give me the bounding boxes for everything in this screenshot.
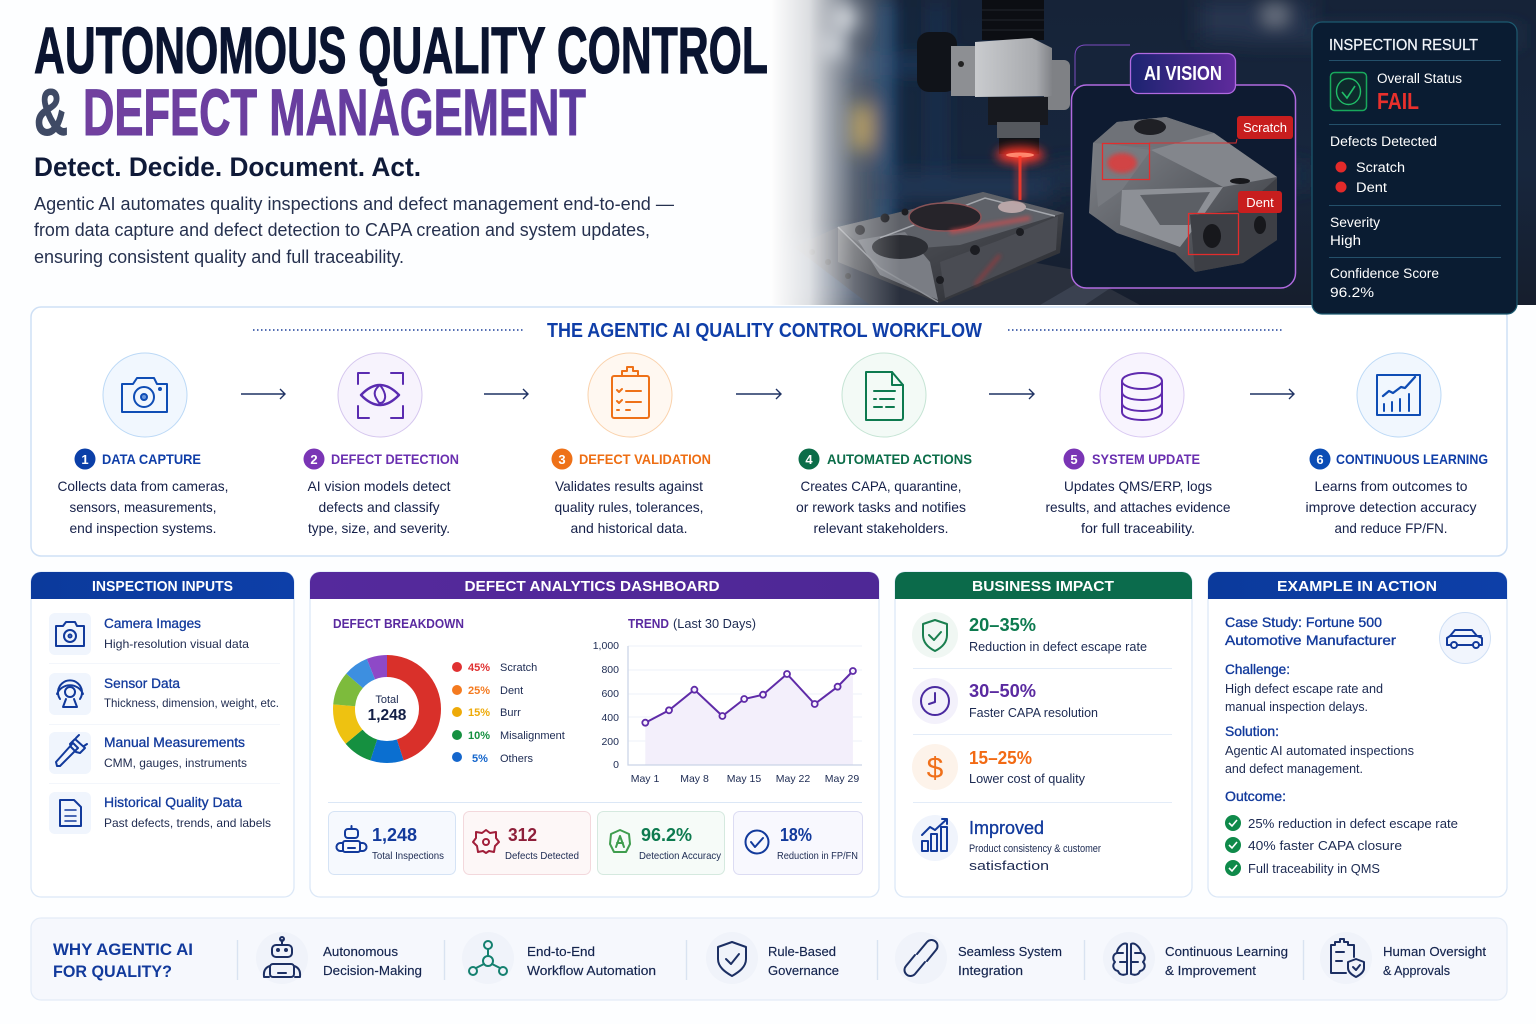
benefit: seamless system integration: Seamless System [958,944,1062,959]
input: manual measurements [49,732,247,774]
challenge: Challenge: [1225,661,1290,677]
impact: defect escape: Reduction in defect escape rate [969,640,1147,654]
AI vision panel [1072,45,1296,288]
panel: inspection result: High [1330,233,1361,248]
input: manual measurements: CMM, gauges, instruments [104,756,247,770]
panel: inspection result: FAIL [1377,88,1419,114]
step 5: system update: for full traceability. [1081,520,1195,536]
solution: and defect management. [1225,762,1363,776]
step 5: system update: 5 [1070,452,1078,467]
step 6: continuous learning: 6 [1316,452,1324,467]
line chart: trend: 600 [601,688,619,700]
impact: CAPA resolution [912,678,1098,724]
panel: why agentic AI [31,918,1507,1000]
impact: product consistency [912,815,1101,873]
icon: car [1440,612,1490,664]
step 6: continuous learning: CONTINUOUS LEARNING [1336,451,1488,467]
step 3: defect validation: and historical data. [570,520,688,536]
step 4: automated actions: relevant stakeholders. [814,520,948,536]
panel: inspection result: Scratch [1356,160,1405,175]
step 1: data capture: 1 [81,452,89,467]
input: camera images: Camera Images [104,616,201,631]
step 2: defect detection: DEFECT DETECTION [331,451,459,467]
donut chart: Total [375,694,399,706]
benefit: continuous learning [1103,932,1288,984]
line chart: trend: May 8 [680,773,709,785]
challenge [1225,661,1383,714]
KPI: detection accuracy [598,812,724,874]
step 6: continuous learning [1306,353,1488,536]
icon: status check [1330,72,1366,110]
heading: defect breakdown: DEFECT BREAKDOWN [333,616,464,631]
KPI: total inspections: 1,248 [372,825,417,845]
AI vision badge: AI VISION [1144,63,1222,85]
heading: workflow: THE AGENTIC AI QUALITY CONTROL WORKFLOW [547,320,982,342]
KPI: total inspections [328,812,456,874]
step 4: automated actions: 4 [805,452,813,467]
panel: inspection result: Severity [1330,215,1380,230]
KPI: reduction in FP/FN: 18% [780,825,812,845]
step 4: automated actions: AUTOMATED ACTIONS [827,451,972,467]
donut legend: 15% [468,707,490,719]
step 2: defect detection: type, size, and severity. [308,520,450,536]
benefit: human oversight and approvals: & Approvals [1383,963,1450,978]
KPI: total inspections: Total Inspections [372,850,444,862]
heading: why agentic AI: FOR QUALITY? [53,962,172,981]
arrow 5 [1250,389,1294,399]
benefit: seamless system integration [895,932,1062,984]
impact: cost of quality: Lower cost of quality [969,772,1086,786]
heading: trend: (Last 30 Days) [673,616,756,631]
line chart: trend: May 29 [825,773,859,785]
step 1: data capture [58,353,228,536]
donut legend: 45% [468,662,490,674]
KPI: reduction in FP/FN [734,812,862,874]
line chart: trend [593,640,862,785]
impact: cost of quality: 15–25% [969,748,1032,768]
KPI: defects detected [464,812,590,874]
panel: inspection result: INSPECTION RESULT [1329,37,1478,54]
panel: example in action [1208,572,1507,897]
heading: why agentic AI: WHY AGENTIC AI [53,940,193,959]
benefit: continuous learning: & Improvement [1165,963,1256,978]
step 4: automated actions [796,353,972,536]
panel: inspection inputs [31,572,294,897]
KPI: defects detected: Defects Detected [505,850,579,862]
panel: example in action: EXAMPLE IN ACTION [1277,578,1437,595]
arrow 4 [989,389,1034,399]
panel: workflow [31,307,1507,556]
impact: defect escape: 20–35% [969,615,1036,635]
panel: inspection result: Dent [1356,180,1387,195]
hero factory photo scene [770,0,1536,305]
defect bounding box: dent [1188,214,1238,254]
KPI: reduction in FP/FN: Reduction in FP/FN [777,850,858,862]
step 2: defect detection: defects and classify [318,499,440,515]
benefit: end-to-end workflow automation [462,932,656,984]
callout: scratch [1149,116,1293,143]
impact: cost of quality [912,744,1086,790]
donut legend: 5% [472,753,488,765]
step 1: data capture: DATA CAPTURE [102,451,201,467]
benefit: end-to-end workflow automation: End-to-End [527,944,595,959]
challenge: High defect escape rate and [1225,682,1383,696]
input: sensor data: Thickness, dimension, weight, etc. [104,696,279,710]
step 4: automated actions: or rework tasks and notifies [796,499,966,515]
step 5: system update: SYSTEM UPDATE [1092,451,1200,467]
panel: business impact: BUSINESS IMPACT [972,578,1114,595]
donut chart: 1,248 [368,707,407,724]
impact: product consistency: Improved [969,818,1044,838]
outcome: Full traceability in QMS [1248,861,1380,876]
AI vision badge [1130,54,1236,94]
callout: scratch: Scratch [1243,120,1287,135]
step 5: system update [1046,353,1231,536]
heading: trend [628,616,756,631]
step 2: defect detection: 2 [310,452,318,467]
callout: dent [1238,191,1282,213]
line chart: trend: May 1 [631,773,659,785]
panel: inspection result: Confidence Score [1330,266,1439,281]
donut legend: 10% [468,730,490,742]
benefit: autonomous decision-making: Decision-Making [323,963,422,978]
outcome: Outcome: [1225,788,1286,804]
panel: inspection result: Overall Status [1377,71,1462,86]
line chart: trend: 800 [601,664,619,676]
panel: inspection result [1312,22,1517,314]
step 3: defect validation: quality rules, tolerances, [554,499,704,515]
donut legend: Scratch [500,662,537,674]
donut chart [344,666,430,752]
panel: defect analytics dashboard [310,572,879,897]
benefit: human oversight and approvals [1320,932,1486,984]
input: sensor data: Sensor Data [104,676,180,691]
robot inspection camera with laser [917,0,1070,200]
line chart: trend: May 15 [727,773,761,785]
title: DEFECT MANAGEMENT [83,75,586,149]
step 1: data capture: end inspection systems. [70,520,216,536]
intro paragraph: from data capture and defect detection to CAPA creation and system updates, [34,219,650,240]
step 5: system update: Updates QMS/ERP, logs [1064,478,1212,494]
step 5: system update: results, and attaches evidence [1046,499,1231,515]
impact: product consistency: Product consistency & customer [969,843,1101,855]
title: & [34,75,68,149]
KPI: defects detected: 312 [508,825,537,845]
step 6: continuous learning: Learns from outcomes to [1314,478,1468,494]
line chart: trend: 200 [601,736,619,748]
input: sensor data [49,673,279,715]
intro paragraph: ensuring consistent quality and full traceability. [34,246,404,267]
case study title [1225,614,1396,648]
step 6: continuous learning: improve detection accuracy [1306,499,1476,515]
subtitle: Detect. Decide. Document. Act. [34,152,421,182]
input: historical quality data: Historical Quality Data [104,795,243,810]
input: manual measurements: Manual Measurements [104,735,245,750]
line chart: trend: May 22 [776,773,810,785]
step 3: defect validation: 3 [558,452,566,467]
step 3: defect validation [552,353,711,536]
benefit: autonomous decision-making: Autonomous [323,944,399,959]
arrow 3 [736,389,781,399]
heading: trend: TREND [628,616,669,631]
defect bounding box: scratch [1102,144,1150,180]
benefit: rule-based governance: Governance [768,963,839,978]
step 3: defect validation: DEFECT VALIDATION [579,451,711,467]
step 2: defect detection: AI vision models detect [308,478,451,494]
benefit: end-to-end workflow automation: Workflow Automation [527,963,656,978]
callout: dent: Dent [1246,195,1274,210]
donut legend: Burr [500,707,521,719]
solution [1225,723,1414,776]
line chart: trend: 400 [601,712,619,724]
panel: inspection inputs: INSPECTION INPUTS [92,578,233,595]
title: AUTONOMOUS QUALITY CONTROL [34,13,768,87]
impact: cost of quality: $ [927,752,944,785]
step 1: data capture: sensors, measurements, [70,499,216,515]
donut legend: Misalignment [500,730,565,742]
benefit: human oversight and approvals: Human Oversight [1383,944,1486,959]
solution: Agentic AI automated inspections [1225,744,1414,758]
case study title: Automotive Manufacturer [1225,632,1396,648]
intro paragraph: Agentic AI automates quality inspections and defect management end-to-end — [34,193,674,214]
step 4: automated actions: Creates CAPA, quarantine, [800,478,962,494]
benefit: rule-based governance [706,932,839,984]
case study title: Case Study: Fortune 500 [1225,614,1382,630]
impact: CAPA resolution: 30–50% [969,681,1036,701]
input: historical quality data [49,792,271,834]
KPI: detection accuracy: Detection Accuracy [639,850,722,862]
panel: inspection result: Defects Detected [1330,134,1437,149]
impact: defect escape [912,612,1147,658]
step 1: data capture: Collects data from cameras, [58,478,228,494]
solution: Solution: [1225,723,1279,739]
input: historical quality data: Past defects, trends, and labels [104,816,271,830]
intro paragraph [34,193,674,267]
arrow 1 [241,389,285,399]
step 3: defect validation: Validates results against [555,478,703,494]
KPI: detection accuracy: 96.2% [641,825,692,845]
benefit: continuous learning: Continuous Learning [1165,944,1288,959]
input: camera images [49,613,249,655]
heading: why agentic AI [53,940,193,981]
challenge: manual inspection delays. [1225,700,1368,714]
inspected part close-up [1089,117,1277,272]
donut legend: Others [500,753,534,765]
arrow 2 [484,389,528,399]
outcome [1225,788,1458,876]
step 2: defect detection [304,353,459,536]
outcome: 40% faster CAPA closure [1248,838,1402,853]
conveyor base [794,227,1140,305]
step 6: continuous learning: and reduce FP/FN. [1334,520,1448,536]
line chart: trend: 1,000 [593,640,619,652]
benefit: rule-based governance: Rule-Based [768,944,836,959]
impact: CAPA resolution: Faster CAPA resolution [969,706,1098,720]
impact: product consistency: satisfaction [969,859,1049,873]
donut legend [452,662,565,765]
panel: business impact [895,572,1192,897]
inspected metal part [838,192,1064,303]
input: camera images: High-resolution visual data [104,637,249,651]
outcome: 25% reduction in defect escape rate [1248,816,1458,831]
benefit: autonomous decision-making [256,932,422,984]
line chart: trend: 0 [613,759,619,771]
panel: defect analytics dashboard: DEFECT ANALYTICS DASHBOARD [464,578,720,595]
benefit: seamless system integration: Integration [958,963,1023,978]
title [34,13,768,149]
donut legend: 25% [468,685,490,697]
donut legend: Dent [500,685,523,697]
panel: inspection result: 96.2% [1330,285,1374,300]
